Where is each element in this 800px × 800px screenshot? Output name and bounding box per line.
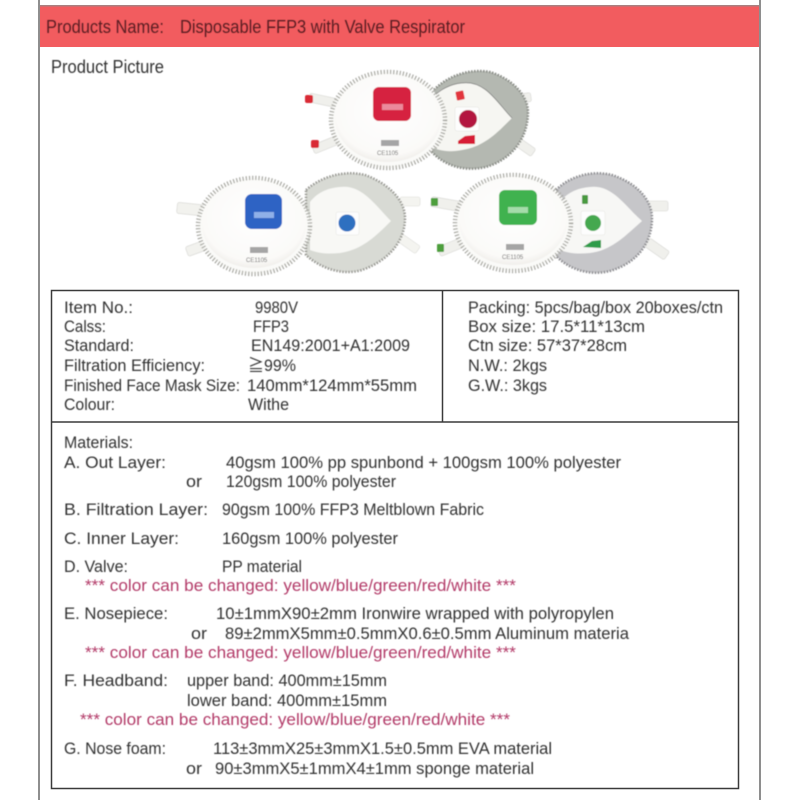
panel: materials: or [186, 473, 203, 491]
panel: materials: 90gsm 100% FFP3 Meltblown Fabric [222, 501, 484, 519]
icon: red mask rear view [430, 71, 536, 169]
panel: materials: 90±3mmX5±1mmX4±1mm sponge material [215, 760, 534, 778]
icon: green mask rear view [556, 173, 670, 273]
panel: materials [64, 434, 630, 778]
icon: red mask front view: CE1105 [377, 151, 399, 157]
panel: packing details: N.W.: 2kgs [468, 357, 547, 375]
panel: materials: lower band: 400mm±15mm [187, 692, 387, 710]
panel: materials: A. Out Layer: [64, 454, 166, 472]
panel: item specifications [64, 299, 417, 414]
panel: packing details: Ctn size: 57*37*28cm [468, 337, 627, 355]
panel: item specifications: Filtration Efficiency: [64, 357, 205, 375]
panel: packing details: G.W.: 3kgs [468, 377, 547, 395]
panel: item specifications: FFP3 [253, 318, 289, 336]
panel: materials: C. Inner Layer: [64, 530, 179, 548]
panel: item specifications: Calss: [64, 318, 106, 336]
title band [40, 5, 759, 47]
product name heading: Products Name: [46, 17, 164, 37]
icon: blue mask front view [176, 178, 310, 274]
panel: materials: 40gsm 100% pp spunbond + 100gsm 100% polyester [226, 454, 621, 472]
panel: materials: B. Filtration Layer: [64, 501, 208, 519]
specification table frame [52, 290, 738, 788]
panel: item specifications: Finished Face Mask Size: [64, 377, 240, 395]
product name value: Disposable FFP3 with Valve Respirator [180, 17, 465, 37]
icon: blue mask rear view [306, 173, 420, 272]
panel: item specifications: Withe [248, 396, 289, 414]
panel: packing details: Packing: 5pcs/bag/box 20boxes/ctn [468, 299, 723, 317]
icon: green mask front view [430, 175, 571, 271]
panel: materials: 160gsm 100% polyester [222, 530, 398, 548]
panel: item specifications: ≧99% [248, 356, 296, 375]
panel: item specifications: Standard: [64, 337, 134, 355]
icon: green mask front view: CE1105 [502, 255, 524, 261]
panel: materials: 120gsm 100% polyester [226, 473, 396, 491]
panel: item specifications: 9980V [255, 299, 298, 317]
icon: blue mask front view: CE1105 [246, 258, 268, 264]
panel: item specifications: Item No.: [64, 299, 133, 317]
panel: materials: E. Nosepiece: [64, 605, 168, 623]
panel: materials: G. Nose foam: [64, 740, 166, 758]
panel: materials: Materials: [64, 434, 133, 452]
panel: packing details: Box size: 17.5*11*13cm [468, 318, 645, 336]
panel: materials: upper band: 400mm±15mm [187, 672, 387, 690]
panel: materials: D. Valve: [64, 558, 128, 576]
panel: materials: 10±1mmX90±2mm Ironwire wrapped with polyropylen [216, 605, 614, 623]
panel: item specifications: Colour: [64, 396, 115, 414]
panel: materials: or [191, 625, 208, 643]
panel: materials: *** color can be changed: yellow/blue/green/red/white *** [85, 644, 517, 662]
panel: materials: 113±3mmX25±3mmX1.5±0.5mm EVA material [213, 740, 552, 758]
panel: materials: 89±2mmX5mm±0.5mmX0.6±0.5mm Aluminum materia [225, 625, 630, 643]
panel: materials: PP material [222, 558, 302, 576]
product picture heading: Product Picture [51, 57, 164, 77]
panel: packing details [468, 299, 723, 395]
panel: materials: *** color can be changed: yellow/blue/green/red/white *** [85, 577, 517, 595]
panel: item specifications: EN149:2001+A1:2009 [251, 337, 410, 355]
panel: materials: *** color can be changed: yellow/blue/green/red/white *** [80, 711, 511, 729]
icon: red mask front view [305, 72, 445, 168]
product photos [176, 71, 670, 274]
panel: materials: or [186, 760, 203, 778]
panel: item specifications: 140mm*124mm*55mm [247, 377, 417, 395]
panel: materials: F. Headband: [64, 672, 168, 690]
